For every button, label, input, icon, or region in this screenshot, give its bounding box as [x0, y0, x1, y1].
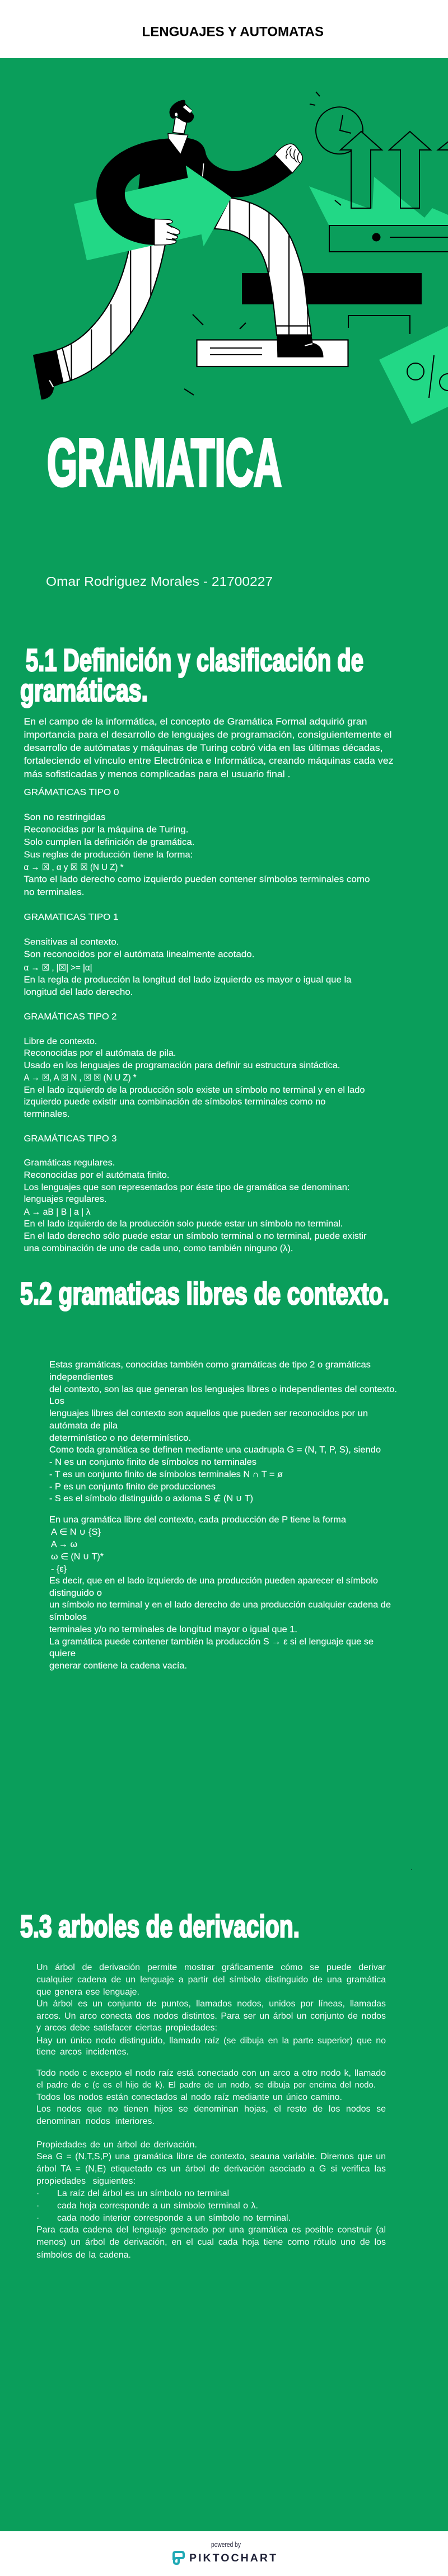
heading 5.1: gramáticas.: [20, 673, 148, 708]
text block: 5.3 derivation trees: La raíz del árbol es un símbolo no terminal: [57, 2189, 229, 2198]
text block: 5.3 derivation trees: Todos los nodos están conectados al nodo raíz mediante un único camino.: [36, 2093, 342, 2102]
front leg: [214, 198, 311, 335]
text block: gramaticas tipo 2: Libre de contexto.: [24, 1037, 97, 1046]
icon: clock: [310, 92, 363, 154]
text block: 5.2 productions: A → ω: [51, 1540, 77, 1549]
front shoe: [277, 334, 323, 358]
text block: 5.3 derivation trees: Para cada cadena del lenguaje generado por una gramática es posible construir (al: [36, 2225, 386, 2235]
text block: gramaticas tipo 0: no terminales.: [24, 888, 84, 897]
text block: gramaticas tipo 3: Reconocidas por el autómata finito.: [24, 1171, 169, 1180]
collar: [168, 134, 188, 154]
running man: [33, 100, 323, 399]
text block: gramaticas tipo 1: [24, 913, 352, 997]
text block: 5.1 intro: En el campo de la informática, el concepto de Gramática Formal adquirió gran: [24, 716, 367, 727]
text block: gramaticas tipo 1: En la regla de producción la longitud del lado izquierdo es mayor o igual que la: [24, 975, 352, 985]
author line: Omar Rodriguez Morales - 21700227: [46, 574, 273, 589]
text block: gramaticas tipo 2: izquierdo puede existir una combinación de símbolos terminales como no: [24, 1097, 326, 1107]
text block: gramaticas tipo 3: En el lado derecho sólo puede estar un símbolo terminal o no terminal, puede existir: [24, 1231, 367, 1241]
paper under shoe: [197, 340, 348, 366]
text block: 5.3 derivation trees: Propiedades de un árbol de derivación.: [36, 2140, 197, 2150]
text block: 5.3 derivation trees: ·: [36, 2201, 39, 2211]
text block: 5.2 productions: generar contiene la cadena vacía.: [49, 1661, 187, 1671]
text block: 5.3 derivation trees: ·: [36, 2189, 39, 2198]
text block: 5.3 derivation trees: Un árbol de derivación permite mostrar gráficamente cómo se puede derivar: [36, 1963, 386, 1972]
text block: 5.2 productions: La gramática puede contener también la producción S → ε si el lenguaje que se: [49, 1637, 374, 1647]
text block: 5.2 definition: determinístico o no determinístico.: [49, 1433, 191, 1443]
text block: 5.3 derivation trees: arcos. Un arco conecta dos nodos distintos. Para ser un árbol un conjunto de nodos: [36, 2011, 386, 2021]
text block: gramaticas tipo 2: En el lado izquierdo de la producción solo existe un símbolo no terminal y en el lado: [24, 1085, 365, 1095]
text block: 5.1 intro: importancia para el desarrollo de lenguajes de programación, consiguientemente el: [24, 730, 392, 740]
heading 5.3: 5.3 arboles de derivacion.: [20, 1909, 300, 1944]
big light green arrow: [74, 166, 231, 260]
text block: gramaticas tipo 0: Sus reglas de producción tiene la forma:: [24, 850, 193, 860]
text block: 5.3 derivation trees: símbolos de la cadena.: [36, 2250, 131, 2260]
text block: 5.2 productions: A ∈ N ∪ {S}: [51, 1527, 101, 1537]
light green jagged shape: [309, 177, 448, 225]
left hand: [155, 219, 180, 245]
back leg: [56, 243, 165, 383]
motion ticks: [184, 314, 246, 395]
text block: 5.2 definition: - S es el símbolo distinguido o axioma S ∉ (N ∪ T): [49, 1494, 253, 1503]
text block: 5.3 derivation trees: cualquier cadena de un lenguaje a partir del símbolo distinguido de una gramática: [36, 1975, 386, 1985]
text block: 5.1 intro: [24, 716, 393, 779]
text block: 5.3 derivation trees: árbol TA = (N,E) etiquetado es un árbol de derivación asociado a G si verifica las: [36, 2164, 386, 2174]
main title: GRAMATICA: [47, 425, 282, 500]
text block: gramaticas tipo 2: A → ☒, A ☒ N , ☒ ☒ (N U Z) *: [24, 1073, 137, 1083]
text block: 5.3 derivation trees: que genera ese lenguaje.: [36, 1987, 139, 1997]
text block: 5.2 productions: distinguido o: [49, 1588, 102, 1598]
text block: 5.3 derivation trees: cada nodo interior corresponde a un símbolo no terminal.: [57, 2213, 291, 2223]
text block: gramaticas tipo 2: Reconocidas por el autómata de pila.: [24, 1049, 176, 1058]
text block: 5.2 definition: - N es un conjunto finito de símbolos no terminales: [49, 1458, 256, 1467]
text block: 5.2 definition: - T es un conjunto finito de símbolos terminales N ∩ T = ø: [49, 1470, 283, 1479]
text block: 5.2 productions: - {ε}: [51, 1564, 67, 1574]
text block: gramaticas tipo 2: Usado en los lenguajes de programación para definir su estructura sintáctica.: [24, 1061, 340, 1070]
text block: 5.2 definition: Los: [49, 1397, 64, 1406]
text block: 5.2 productions: ω ∈ (N ∪ T)*: [51, 1552, 104, 1562]
text block: gramaticas tipo 2: [24, 1011, 365, 1119]
right fist: [275, 144, 302, 173]
text block: 5.3 derivation trees: y arcos debe satisfacer ciertas propiedades:: [36, 2023, 217, 2033]
text block: gramaticas tipo 1: GRAMATICAS TIPO 1: [24, 913, 119, 922]
text block: 5.3 derivation trees: el padre de c (c es el hijo de k). El padre de un nodo, se dibuja por encima del nodo.: [36, 2080, 376, 2090]
icon: piktochart logo: [174, 2552, 184, 2564]
text block: gramaticas tipo 1: Sensitivas al contexto.: [24, 938, 119, 947]
text block: gramaticas tipo 0: Son no restringidas: [24, 813, 105, 822]
text block: 5.2 definition: autómata de pila: [49, 1421, 118, 1431]
text block: gramaticas tipo 0: GRÁMATICAS TIPO 0: [24, 787, 119, 797]
text block: 5.2 productions: Es decir, que en el lado izquierdo de una producción pueden aparecer el símbolo: [49, 1576, 378, 1586]
text block: 5.2 definition: [49, 1360, 397, 1503]
black bar: [242, 273, 422, 304]
text block: gramaticas tipo 0: Tanto el lado derecho como izquierdo pueden contener símbolos terminales como: [24, 875, 370, 885]
hero illustration: [33, 92, 448, 424]
neck: [173, 116, 187, 134]
text block: 5.3 derivation trees: menos) un árbol de derivación, en el cual cada hoja tiene como rótulo uno de los: [36, 2237, 386, 2247]
heading 5.1: [20, 642, 363, 708]
arrow head mask over clock: [340, 131, 382, 168]
text block: 5.3 derivation trees: ·: [36, 2213, 39, 2223]
text block: gramaticas tipo 2: terminales.: [24, 1110, 69, 1119]
text block: 5.2 definition: - P es un conjunto finito de producciones: [49, 1482, 216, 1492]
text block: 5.2 definition: lenguajes libres del contexto son aquellos que pueden ser reconocidos por un: [49, 1409, 368, 1418]
text block: gramaticas tipo 3: una combinación de uno de cada uno, como también ninguno (λ).: [24, 1244, 293, 1253]
text block: gramaticas tipo 1: Son reconocidos por el autómata linealmente acotado.: [24, 950, 254, 960]
text block: 5.3 derivation trees: Hay un único nodo distinguido, llamado raíz (se dibuja en la parte superior) que no: [36, 2036, 386, 2046]
black shirt and arms: [96, 138, 292, 245]
text block: 5.2 productions: un símbolo no terminal y en el lado derecho de una producción cualquier cadena de: [49, 1600, 391, 1610]
text block: 5.2 definition: Estas gramáticas, conocidas también como gramáticas de tipo 2 o gramáticas: [49, 1360, 371, 1370]
text block: 5.3 derivation trees: Sea G = (N,T,S,P) una gramática libre de contexto, seauna variable. Diremos que un: [36, 2152, 386, 2161]
text block: 5.3 derivation trees: cada hoja corresponde a un símbolo terminal o λ.: [57, 2201, 258, 2211]
text block: 5.1 intro: fortaleciendo el vínculo entre Electrónica e Informática, creando máquinas cada vez: [24, 755, 393, 766]
percent card: [379, 326, 448, 424]
footer: [0, 2531, 448, 2576]
text block: gramaticas tipo 3: Los lenguajes que son representados por éste tipo de gramática se denominan:: [24, 1183, 349, 1192]
text block: 5.2 productions: símbolos: [49, 1613, 87, 1622]
text block: 5.2 definition: Como toda gramática se definen mediante una cuadrupla G = (N, T, P, S), siendo: [49, 1445, 381, 1455]
text block: gramaticas tipo 0: Reconocidas por la máquina de Turing.: [24, 825, 188, 835]
text block: 5.1 intro: más sofisticadas y menos complicadas para el usuario final .: [24, 769, 290, 779]
text block: 5.3 derivation trees: Un árbol es un conjunto de puntos, llamados nodos, unidos por líneas, llamadas: [36, 1999, 386, 2009]
text block: gramaticas tipo 0: α → ☒ , α y ☒ ☒ (N U Z) *: [24, 863, 123, 872]
text block: 5.3 derivation trees: Todo nodo c excepto el nodo raíz está conectado con un arco a otro nodo k, llamado: [36, 2069, 386, 2078]
bracket: [348, 316, 410, 334]
text block: gramaticas tipo 1: longitud del lado derecho.: [24, 988, 133, 997]
back shoe: [33, 350, 63, 399]
text block: 5.3 derivation trees: Los nodos que no tienen hijos se denominan hojas, el resto de los nodos se: [36, 2104, 386, 2114]
outlined bar with dot: [329, 225, 448, 252]
text block: 5.3 derivation trees: [36, 1963, 386, 2260]
text block: gramaticas tipo 2: GRAMÁTICAS TIPO 2: [24, 1011, 117, 1022]
text block: gramaticas tipo 0: [24, 787, 370, 897]
text block: 5.2 productions: [49, 1515, 391, 1671]
icon: three up arrows: [335, 131, 448, 208]
text block: gramaticas tipo 3: lenguajes regulares.: [24, 1195, 107, 1204]
text block: 5.2 productions: quiere: [49, 1649, 76, 1658]
text block: gramaticas tipo 3: Gramáticas regulares.: [24, 1158, 115, 1168]
text block: gramaticas tipo 1: α → ☒ , |☒| >= |α|: [24, 963, 92, 973]
text block: 5.2 productions: terminales y/o no terminales de longitud mayor o igual que 1.: [49, 1625, 297, 1634]
text block: 5.2 definition: independientes: [49, 1372, 113, 1382]
head: [169, 100, 194, 123]
text block: 5.2 definition: del contexto, son las que generan los lenguajes libres o independientes del contexto.: [49, 1385, 397, 1394]
text block: gramaticas tipo 3: [24, 1133, 367, 1253]
text block: 5.3 derivation trees: tiene arcos incidentes.: [36, 2047, 129, 2057]
text block: 5.3 derivation trees: denominan nodos interiores.: [36, 2117, 155, 2126]
text block: gramaticas tipo 0: Solo cumplen la definición de gramática.: [24, 838, 195, 847]
piktochart wordmark: PIKTOCHART: [189, 2552, 276, 2564]
text block: gramaticas tipo 3: GRAMÁTICAS TIPO 3: [24, 1133, 117, 1144]
shirt seam: [203, 163, 204, 176]
text block: gramaticas tipo 3: En el lado izquierdo de la producción solo puede estar un símbolo no terminal.: [24, 1219, 343, 1229]
text block: gramaticas tipo 3: A → aB | B | a | λ: [24, 1207, 91, 1217]
text block: 5.2 productions: En una gramática libre del contexto, cada producción de P tiene la forma: [49, 1515, 346, 1525]
text block: 5.1 intro: desarrollo de autómatas y máquinas de Turing cobró vida en las últimas décadas,: [24, 742, 383, 753]
powered by: powered by: [211, 2541, 241, 2549]
text block: 5.3 derivation trees: propiedades siguientes:: [36, 2177, 136, 2186]
header title: LENGUAJES Y AUTOMATAS: [142, 25, 324, 39]
